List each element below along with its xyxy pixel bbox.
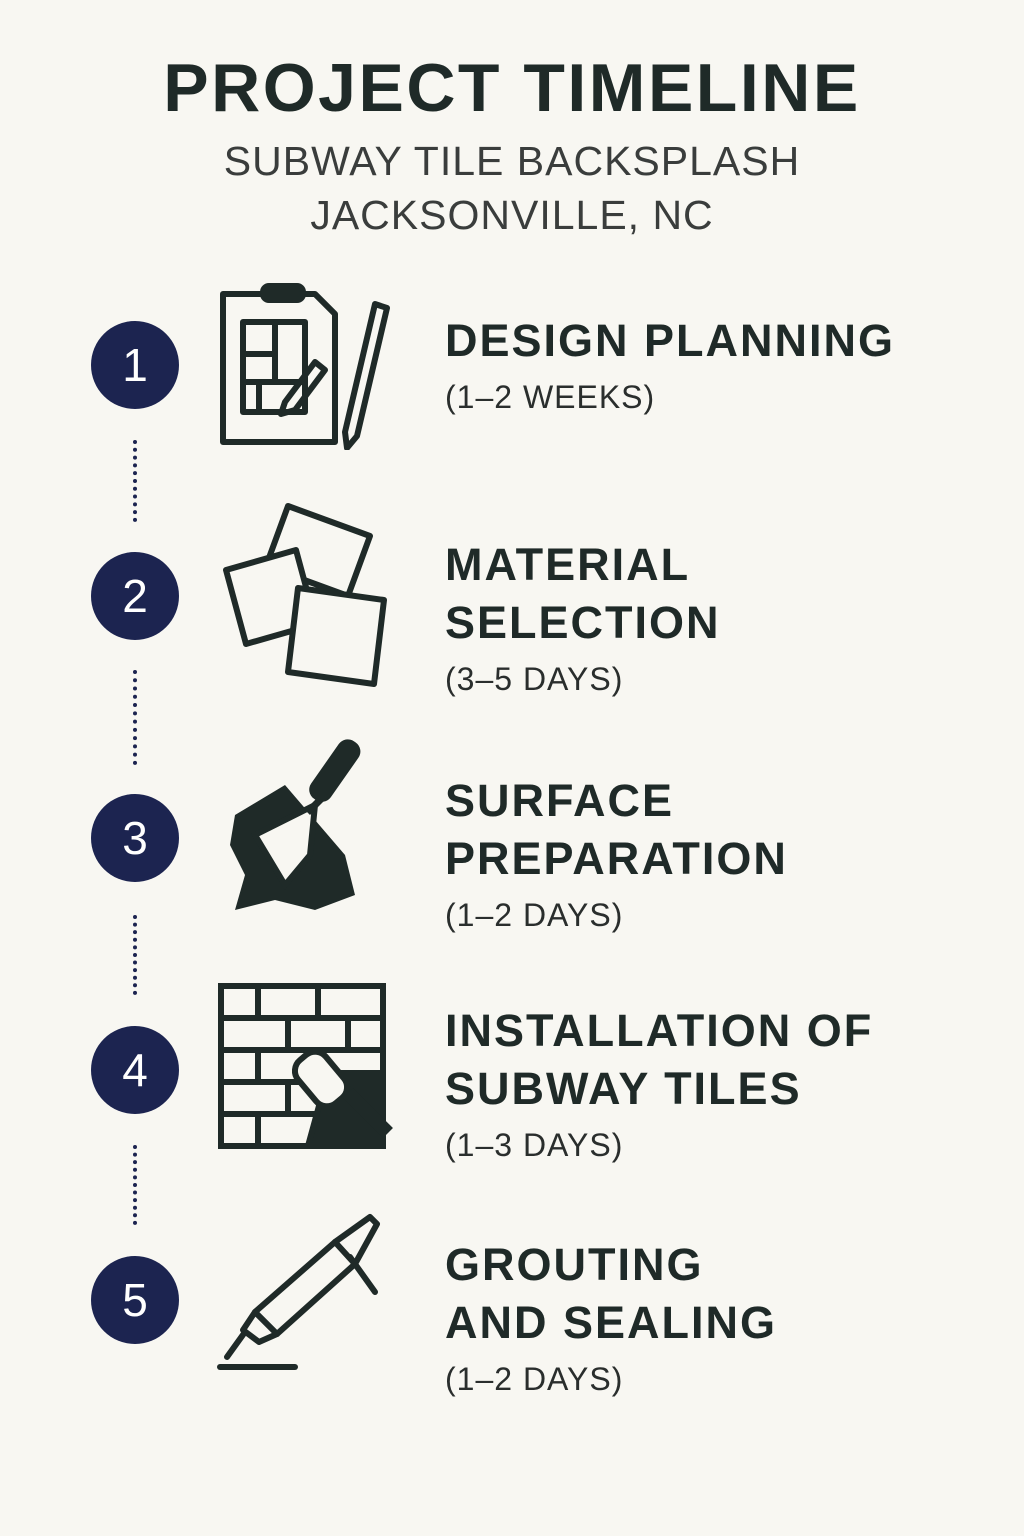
step 5 text xyxy=(445,1239,777,1397)
step 1 number xyxy=(91,321,179,409)
step 2 number: 2 xyxy=(122,570,148,622)
icon: blueprint and pencil xyxy=(220,283,390,450)
step 3 number xyxy=(91,794,179,882)
title: PROJECT TIMELINE xyxy=(163,50,861,126)
step 1 text: DESIGN PLANNING xyxy=(445,315,895,366)
connector 2-3 xyxy=(133,670,137,765)
subtitle: JACKSONVILLE, NC xyxy=(310,192,714,238)
step 4 text xyxy=(445,1005,873,1163)
step 1 text: (1–2 WEEKS) xyxy=(445,379,655,415)
step 5 text: (1–2 DAYS) xyxy=(445,1361,623,1397)
step 4 number xyxy=(91,1026,179,1114)
step 5 number: 5 xyxy=(122,1274,148,1326)
step 2 text: MATERIAL xyxy=(445,539,690,590)
icon: brick wall with roller xyxy=(218,983,393,1149)
connector 3-4 xyxy=(133,915,137,995)
step 4 text: SUBWAY TILES xyxy=(445,1063,802,1114)
step 3 text xyxy=(445,775,788,933)
step 1 text xyxy=(445,315,895,415)
step 1 number: 1 xyxy=(122,339,148,391)
icon: caulk gun xyxy=(217,1214,380,1370)
step 2 text: SELECTION xyxy=(445,597,721,648)
step 4 number: 4 xyxy=(122,1044,148,1096)
subtitle xyxy=(224,138,800,238)
step 4 text: (1–3 DAYS) xyxy=(445,1127,623,1163)
step 2 text xyxy=(445,539,721,697)
icon: trowel xyxy=(230,739,360,910)
step 4 text: INSTALLATION OF xyxy=(445,1005,873,1056)
step 3 text: SURFACE xyxy=(445,775,674,826)
step 5 text: AND SEALING xyxy=(445,1297,777,1348)
connector 1-2 xyxy=(133,440,137,522)
step 2 number xyxy=(91,552,179,640)
step 5 number xyxy=(91,1256,179,1344)
step 3 text: (1–2 DAYS) xyxy=(445,897,623,933)
step 3 text: PREPARATION xyxy=(445,833,788,884)
step 5 text: GROUTING xyxy=(445,1239,704,1290)
step 3 number: 3 xyxy=(122,812,148,864)
subtitle: SUBWAY TILE BACKSPLASH xyxy=(224,138,800,184)
step 2 text: (3–5 DAYS) xyxy=(445,661,623,697)
connector 4-5 xyxy=(133,1145,137,1225)
icon: tiles xyxy=(223,503,387,687)
